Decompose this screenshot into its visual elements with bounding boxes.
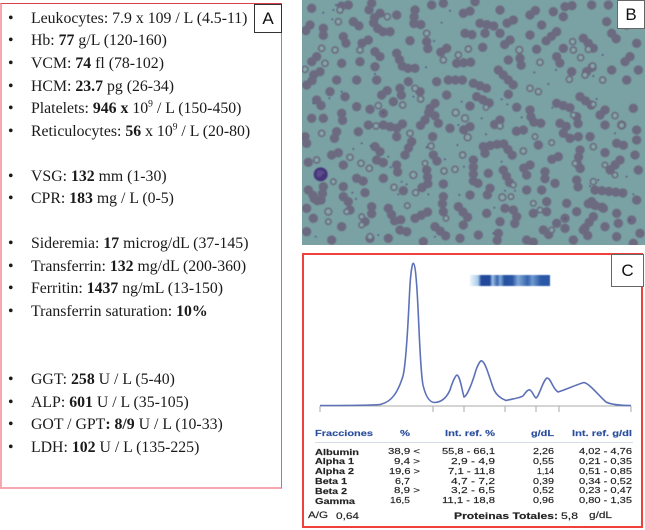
- text block: iron studies: Transferrin saturation: 10%: [31, 303, 208, 320]
- table: protein fractions: [308, 428, 633, 521]
- text block: blood count: [8, 10, 250, 140]
- text block: inflammation markers: •: [8, 168, 14, 185]
- text block: blood count: VCM: 74 fl (78-102): [31, 55, 164, 72]
- text block: inflammation markers: CPR: 183 mg / L (0-5): [31, 190, 174, 207]
- label A: [254, 4, 282, 33]
- table row: Alpha 2: 0,51 - 0,85: [579, 467, 633, 476]
- table header: [315, 428, 632, 438]
- total proteins: Proteinas Totales:: [454, 511, 558, 521]
- table row: Alpha 2: Alpha 2: [315, 467, 355, 476]
- table row: Beta 2: Beta 2: [315, 487, 348, 496]
- table row: Albumin: [315, 447, 633, 457]
- text block: inflammation markers: •: [8, 190, 14, 207]
- electrophoresis baseline and ticks: [320, 406, 631, 412]
- table row: Gamma: 16,5: [390, 496, 411, 505]
- table row: Alpha 1: 2,9 - 4,9: [451, 457, 496, 466]
- table row: Albumin: 38,9 <: [388, 447, 420, 456]
- text block: blood count: •: [8, 32, 14, 49]
- label C: C: [621, 261, 634, 280]
- text block: liver enzymes: GGT: 258 U / L (5-40): [31, 371, 175, 388]
- electrophoresis curve: [320, 263, 631, 406]
- text block: iron studies: •: [8, 258, 14, 275]
- table row: Beta 1: Beta 1: [315, 477, 348, 486]
- table row: Beta 1: 4,7 - 7,2: [451, 477, 496, 486]
- text block: liver enzymes: LDH: 102 U / L (135-225): [31, 439, 199, 456]
- text block: blood count: •: [8, 123, 14, 140]
- text block: liver enzymes: •: [8, 371, 14, 388]
- table row: Albumin: 2,26: [533, 447, 555, 456]
- panel B: blood smear micrograph: [302, 0, 645, 245]
- table header: %: [400, 428, 410, 438]
- panel A: laboratory values: [0, 3, 282, 489]
- text block: blood count: Platelets: 946 x 109 / L (150-450): [31, 100, 241, 117]
- text block: iron studies: Transferrin: 132 mg/dL (200-360): [31, 258, 246, 275]
- text block: inflammation markers: VSG: 132 mm (1-30): [31, 168, 167, 185]
- panel C: serum protein electrophoresis: [302, 253, 643, 528]
- text block: liver enzymes: [8, 371, 223, 456]
- text block: blood count: •: [8, 10, 14, 27]
- table row: Beta 2: 0,23 - 0,47: [579, 486, 633, 495]
- table row: Alpha 1: [315, 457, 633, 466]
- label C: [611, 254, 644, 287]
- table row: Beta 1: [315, 477, 633, 486]
- table row: Albumin: 4,02 - 4,76: [579, 447, 633, 456]
- text block: blood count: Leukocytes: 7.9 x 109 / L (4.5-11): [31, 10, 247, 27]
- text block: liver enzymes: ALP: 601 U / L (35-105): [31, 394, 189, 411]
- total proteins: g/dL: [589, 510, 612, 520]
- text block: liver enzymes: •: [8, 394, 14, 411]
- A/G ratio: [308, 510, 359, 521]
- total proteins: [454, 510, 612, 521]
- table row: Alpha 2: 7,1 - 11,8: [448, 467, 496, 476]
- text block: iron studies: •: [8, 235, 14, 252]
- text block: iron studies: [8, 235, 248, 320]
- text block: iron studies: Sideremia: 17 microg/dL (37-145): [31, 235, 248, 252]
- text block: liver enzymes: GOT / GPT: 8/9 U / L (10-33): [31, 416, 223, 433]
- table row: Alpha 1: 0,55: [533, 457, 555, 466]
- table row: Alpha 2: 1,14: [537, 467, 554, 476]
- table row: Alpha 1: Alpha 1: [315, 457, 355, 466]
- table header: Int. ref. %: [445, 428, 495, 438]
- text block: blood count: •: [8, 78, 14, 95]
- text block: iron studies: Ferritin: 1437 ng/mL (13-150): [31, 280, 223, 297]
- table row: Alpha 1: 9,4 >: [394, 457, 420, 466]
- text block: inflammation markers: [8, 168, 174, 207]
- text block: blood count: HCM: 23.7 pg (26-34): [31, 78, 174, 95]
- A/G ratio: A/G: [308, 510, 328, 520]
- label A: A: [262, 9, 274, 28]
- table row: Beta 2: 3,2 - 6,5: [451, 486, 496, 495]
- table row: Gamma: Gamma: [315, 497, 356, 506]
- table row: Gamma: 0,80 - 1,35: [579, 496, 633, 505]
- table row: Beta 1: 6,7: [395, 477, 411, 486]
- text block: blood count: Hb: 77 g/L (120-160): [31, 32, 167, 49]
- table header: Fracciones: [315, 428, 373, 438]
- icon: white blood cell: [314, 167, 328, 181]
- table row: Alpha 2: 19,6 >: [389, 467, 420, 476]
- table row: Beta 2: [315, 486, 633, 496]
- total proteins: 5,8: [561, 511, 578, 521]
- table header: Int. ref. g/dl: [572, 428, 632, 438]
- table row: Beta 2: 0,52: [533, 486, 555, 495]
- table row: Gamma: [315, 496, 633, 506]
- text block: iron studies: •: [8, 303, 14, 320]
- table row: Albumin: 55,8 - 66,1: [442, 447, 496, 456]
- label B: B: [625, 5, 637, 24]
- text block: blood count: •: [8, 55, 14, 72]
- table row: Gamma: 0,96: [533, 496, 555, 505]
- table row: Beta 1: 0,39: [533, 477, 555, 486]
- A/G ratio: 0,64: [336, 511, 359, 521]
- text block: liver enzymes: •: [8, 439, 14, 456]
- table row: Albumin: Albumin: [315, 448, 359, 457]
- gel band: [470, 275, 550, 286]
- table row: Beta 1: 0,34 - 0,52: [579, 477, 633, 486]
- table row: Gamma: 11,1 - 18,8: [442, 496, 496, 505]
- table row: Alpha 2: [315, 467, 633, 476]
- table row: Alpha 1: 0,21 - 0,35: [579, 457, 633, 466]
- text block: liver enzymes: •: [8, 416, 14, 433]
- table row: Beta 2: 8,9 >: [394, 486, 420, 495]
- text block: blood count: •: [8, 100, 14, 117]
- text block: iron studies: •: [8, 280, 14, 297]
- label B: [617, 0, 645, 29]
- table header: g/dL: [531, 428, 554, 438]
- text block: blood count: Reticulocytes: 56 x 109 / L (20-80): [31, 123, 250, 140]
